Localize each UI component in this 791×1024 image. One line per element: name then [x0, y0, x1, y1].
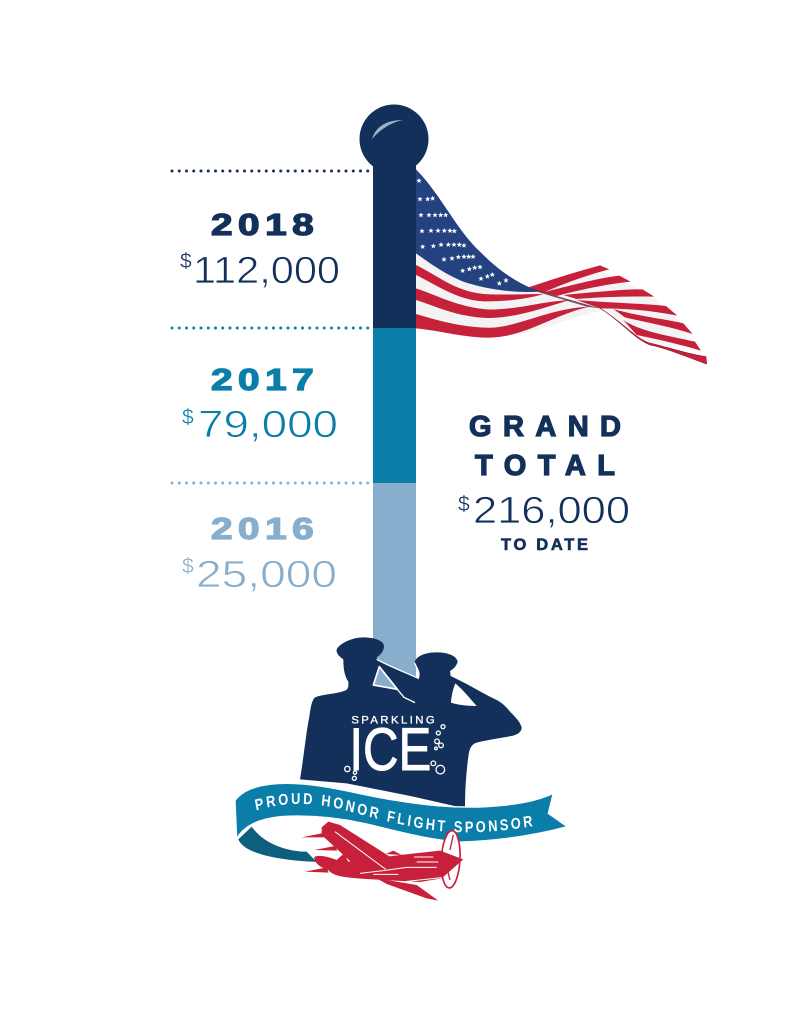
grand total: $ [458, 493, 470, 516]
cockpit [386, 851, 402, 855]
text: 2017 [182, 363, 338, 446]
logo bubbles [345, 725, 445, 780]
grand total: TOTAL [475, 450, 615, 482]
grand total: TO DATE [501, 536, 588, 554]
banner text: PROUD HONOR FLIGHT SPONSOR [254, 793, 533, 832]
dotted divider lines [172, 171, 368, 483]
ball highlight [372, 120, 403, 139]
flag shadow fold [528, 287, 600, 308]
flag [416, 169, 707, 364]
amount 2016: 25,000 [196, 554, 337, 596]
flag white body [416, 253, 690, 347]
saluting soldiers logo [300, 637, 522, 808]
banner ribbon [235, 783, 567, 842]
speed streaks [302, 833, 337, 873]
text: 2018 [180, 208, 340, 292]
amount 2017: $ [182, 406, 194, 429]
amount 2018: 112,000 [193, 250, 340, 292]
amount 2017: 79,000 [198, 404, 338, 446]
text: 2016: 2016 [211, 512, 319, 546]
grand total [458, 411, 630, 554]
flag canton [416, 169, 540, 292]
banner back fold [238, 827, 317, 862]
plane [302, 822, 463, 901]
plane details [335, 832, 442, 881]
pole segment 2016 [373, 483, 416, 683]
logo text: ICE: ICE [349, 716, 431, 783]
logo text: sparkling: SPARKLING [351, 714, 435, 726]
lower wing [377, 878, 438, 901]
amount 2018: $ [180, 250, 192, 273]
text: 2017: 2017 [211, 363, 319, 397]
pole ball [360, 104, 428, 174]
pole gap between soldiers [373, 667, 397, 689]
flag red stripes [416, 265, 707, 364]
text: 2018: 2018 [211, 208, 319, 242]
grand total: GRAND [469, 411, 621, 443]
fuselage [314, 851, 463, 882]
amount 2016: $ [182, 555, 194, 578]
banner and plane [236, 784, 566, 901]
grand total: 216,000 [473, 490, 630, 532]
pole segment 2018 [373, 165, 416, 328]
pole segment 2017 [373, 328, 416, 483]
upper wing [322, 822, 407, 872]
gap under salute arm [451, 683, 477, 706]
flag stars [416, 178, 509, 286]
text: 2016 [182, 512, 337, 596]
propeller [440, 830, 461, 888]
soldiers silhouette [300, 637, 522, 808]
flagpole [360, 104, 428, 683]
